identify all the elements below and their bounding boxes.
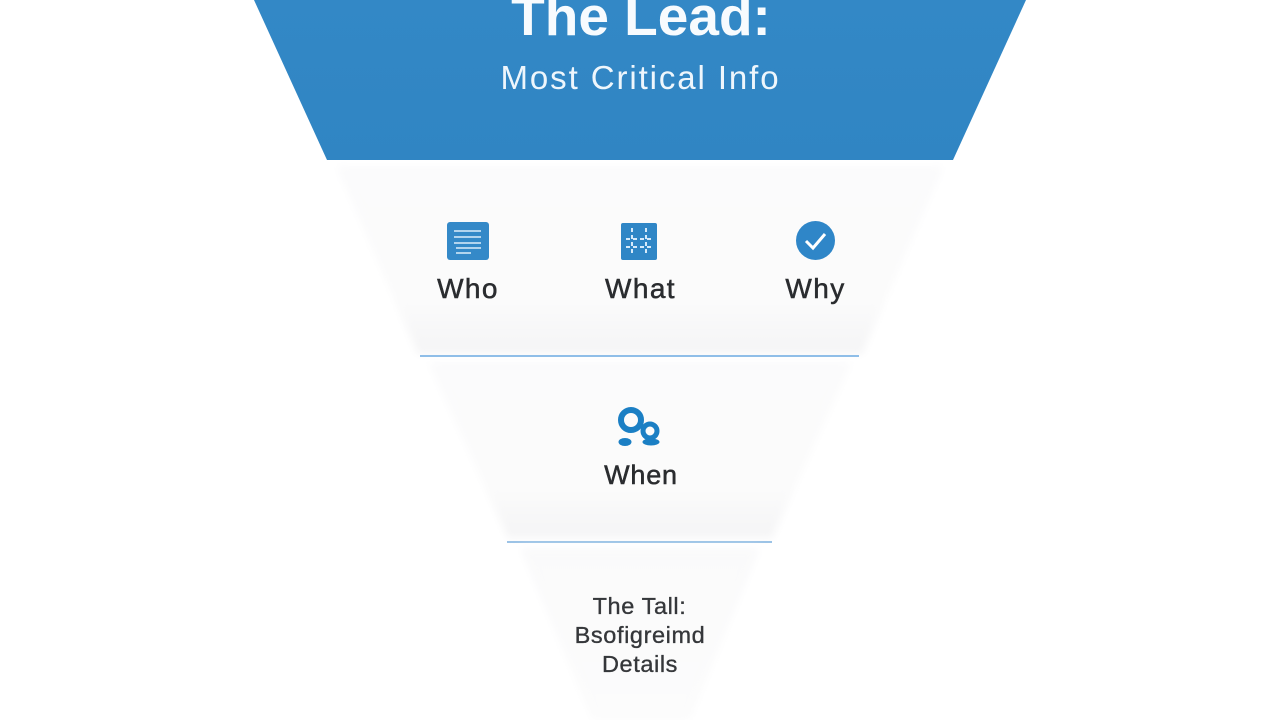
text: the tail background details [575, 593, 705, 677]
icon: document list [447, 222, 489, 260]
text: the tail background details: The Tall: [593, 593, 686, 619]
text: the tail background details: Details [602, 651, 678, 677]
icon: notebook [621, 223, 657, 260]
icon: people [618, 410, 660, 446]
panel: who what why [336, 166, 944, 354]
text: the tail background details: Bsofigreimd [575, 622, 705, 648]
panel: the tail [520, 548, 760, 720]
label: why: Why [785, 273, 846, 304]
subheading: most critical info: Most Critical Info [501, 59, 780, 96]
label: what: What [605, 273, 676, 304]
panel: when [428, 362, 852, 538]
label: when: When [604, 460, 678, 490]
divider lines [420, 355, 859, 543]
icon: check circle [796, 221, 835, 260]
panel: the lead [254, 0, 1026, 160]
label: who: Who [437, 273, 499, 304]
